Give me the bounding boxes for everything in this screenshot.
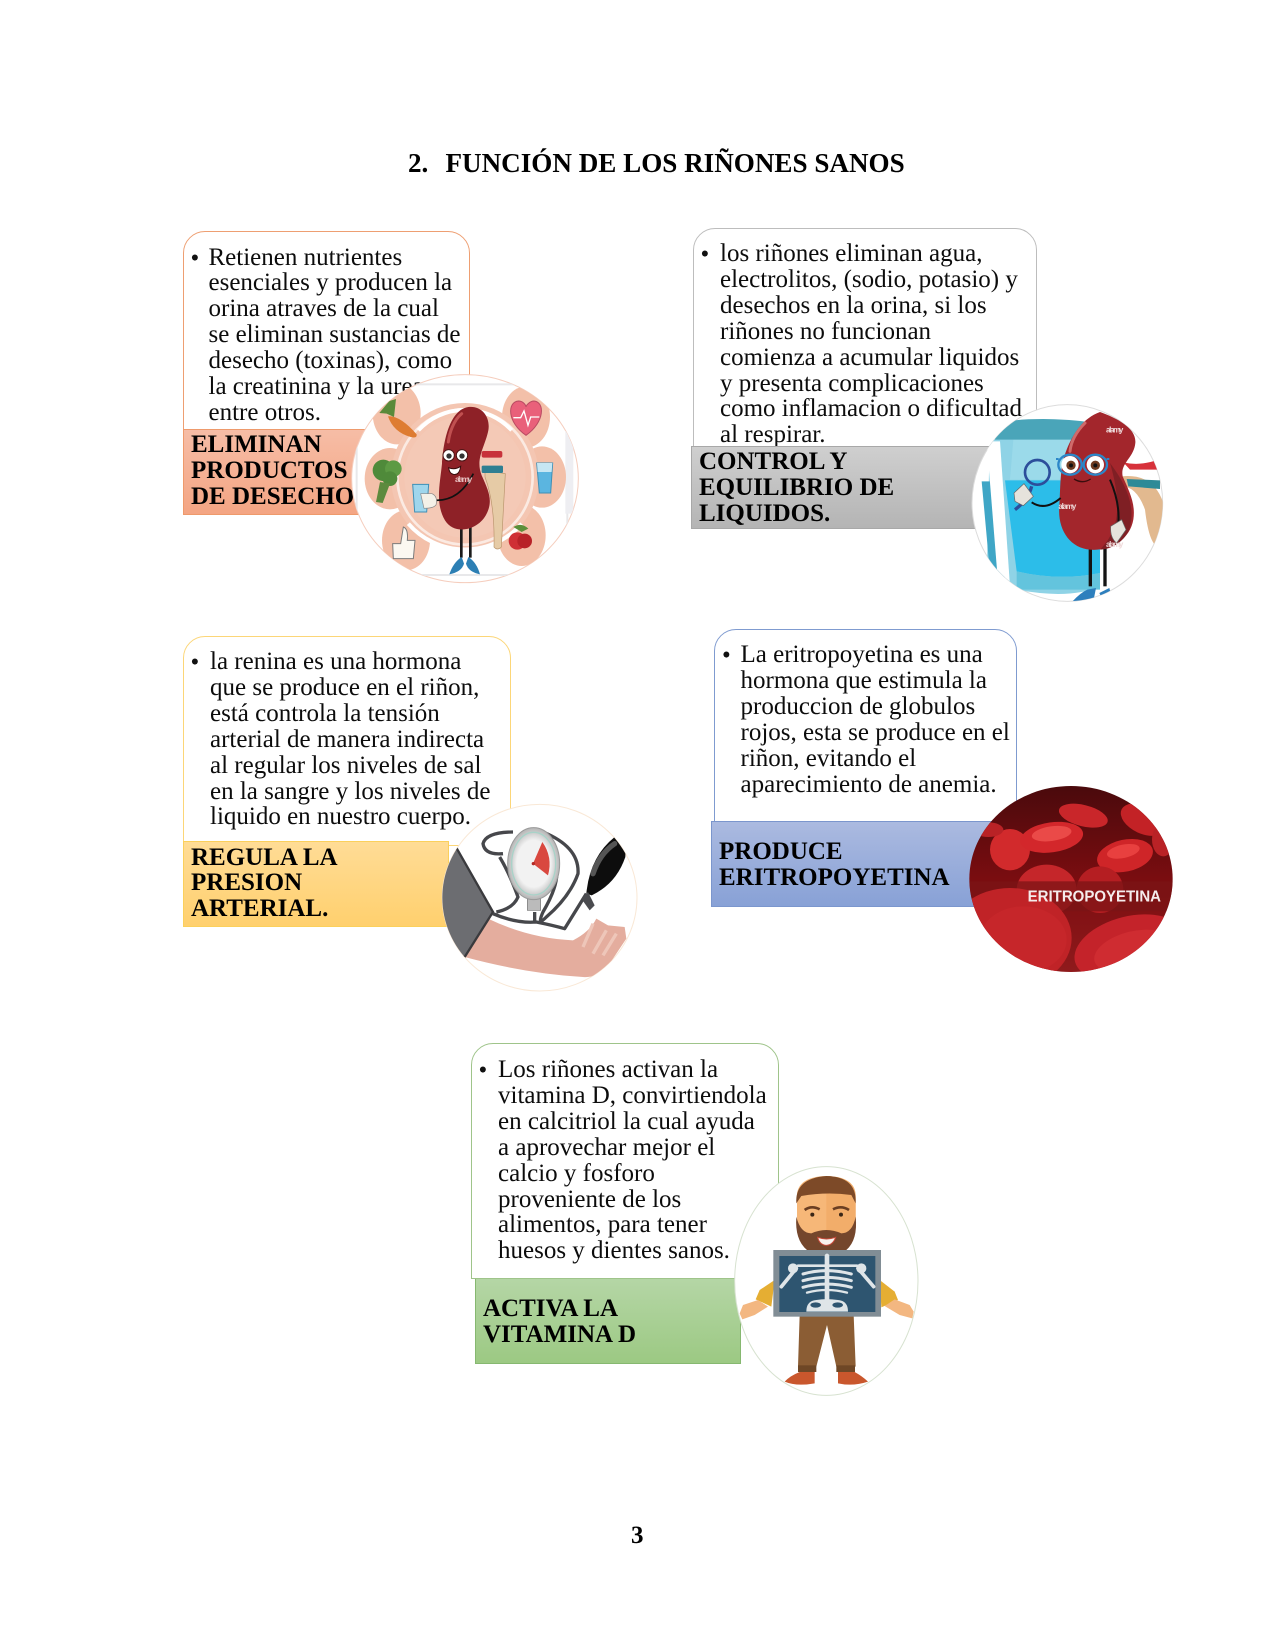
glass and glove <box>413 484 429 512</box>
kidney body <box>439 406 490 529</box>
legs and shoes <box>460 527 463 557</box>
bullet: • <box>722 642 731 669</box>
heading band: eliminan productos de desecho <box>183 429 470 515</box>
icon: apple <box>508 532 522 550</box>
bullet: • <box>700 241 709 268</box>
icon: riñón con lupa y vaso de agua <box>972 404 1164 602</box>
gauge <box>528 897 541 910</box>
text block: retienen nutrientes: Retienen nutrientes esenciales y producen la orina atraves de la cual se eliminan sustancias de desecho (toxinas), como la creatinina y la urea, entre otros. <box>208 244 461 426</box>
bullet: • <box>190 244 199 272</box>
page number: 3 <box>631 1522 644 1549</box>
panel: regula la presion arterial <box>183 636 638 992</box>
heading text: PRODUCE ERITROPOYETINA <box>719 838 950 891</box>
heading band: control y equilibrio <box>691 446 991 529</box>
bullet: • <box>190 649 199 676</box>
bullet: • <box>478 1057 487 1084</box>
icon: glass right <box>537 463 553 493</box>
text block: los riñones activan: Los riñones activan la vitamina D, convirtiendola en calcitriol la cual ayuda a aprovechar mejor el calcio y fosforo proveniente de los alimentos, para tener huesos y dientes sanos. <box>498 1056 767 1264</box>
heading text: CONTROL Y EQUILIBRIO DE LIQUIDOS. <box>699 448 894 527</box>
trousers <box>798 1315 856 1367</box>
heading band: regula la presion arterial <box>183 841 449 927</box>
description card: eritropoyetina <box>714 629 1017 826</box>
icon: hombre con radiografia <box>734 1166 918 1396</box>
icon: riñón con lupa y vaso de agua: alamy <box>1106 540 1124 549</box>
text block: la eritropoyetina: La eritropoyetina es una hormona que estimula la produccion de globulos rojos, esta se produce en el riñon, evitando el aparecimiento de anemia. <box>740 641 1010 798</box>
glass <box>987 427 1100 594</box>
skeleton <box>782 1256 874 1303</box>
heading band: activa la vitamina D <box>474 1277 741 1364</box>
description card: liquidos <box>693 228 1037 450</box>
icon: riñón con alimentos saludables <box>351 374 579 584</box>
description card: desechos <box>183 231 470 433</box>
head <box>797 1176 856 1252</box>
icon: tensiometro en el brazo <box>442 804 638 992</box>
shoes <box>785 1372 815 1385</box>
pump bulb <box>587 837 626 895</box>
tubes <box>483 832 587 928</box>
heading text: REGULA LA PRESION ARTERIAL. <box>191 844 338 922</box>
watermarks: alamy <box>1106 426 1124 435</box>
heading band: produce eritropoyetina <box>710 821 996 907</box>
icon: globulos rojos <box>969 786 1173 972</box>
panel: produce eritropoyetina <box>711 629 1173 972</box>
description card: vitamina D <box>470 1043 778 1279</box>
icon: carrot <box>388 416 417 437</box>
panel: activa la vitamina D <box>471 1043 918 1396</box>
panel: eliminan productos de desecho <box>183 231 579 584</box>
title: 2. <box>408 148 428 178</box>
title: FUNCIÓN DE LOS RIÑONES SANOS <box>446 148 905 178</box>
icon: heart <box>511 401 541 435</box>
text block: la renina: la renina es una hormona que se produce en el riñon, está controla la tensión arterial de manera indirecta al regular los niveles de sal en la sangre y los niveles de liquido en nuestro cuerpo. <box>210 648 490 830</box>
icon: riñón con lupa y vaso de agua: alamy <box>1058 502 1077 511</box>
x-ray frame <box>774 1250 881 1317</box>
icon: riñón con alimentos saludables: alamy <box>455 474 473 484</box>
heading text: ACTIVA LA VITAMINA D <box>483 1295 636 1348</box>
heading text: ELIMINAN PRODUCTOS DE DESECHO <box>191 431 354 510</box>
label in image: ERITROPOYETINA <box>1028 889 1161 906</box>
arm and hand <box>465 918 627 977</box>
description card: presion <box>183 636 511 846</box>
right ureter and vessels <box>485 470 505 549</box>
magnifier, arm and glove <box>1025 460 1050 485</box>
text block: los riñones eliminan agua: los riñones eliminan agua, electrolitos, (sodio, potasio) y desechos en la orina, si los riñones no funcionan comienza a acumular liquidos y presenta complicaciones como inflamacion o dificultad al respirar. <box>720 240 1022 448</box>
cuff <box>442 848 492 957</box>
icon: broccoli <box>372 460 390 481</box>
legs and shoes <box>1089 547 1092 587</box>
panel: control y equilibrio de liquidos <box>691 228 1164 602</box>
right organs <box>1122 476 1163 548</box>
icon: thumbs up <box>393 527 415 558</box>
kidney body <box>1059 412 1135 550</box>
arms and hands <box>756 1280 775 1307</box>
